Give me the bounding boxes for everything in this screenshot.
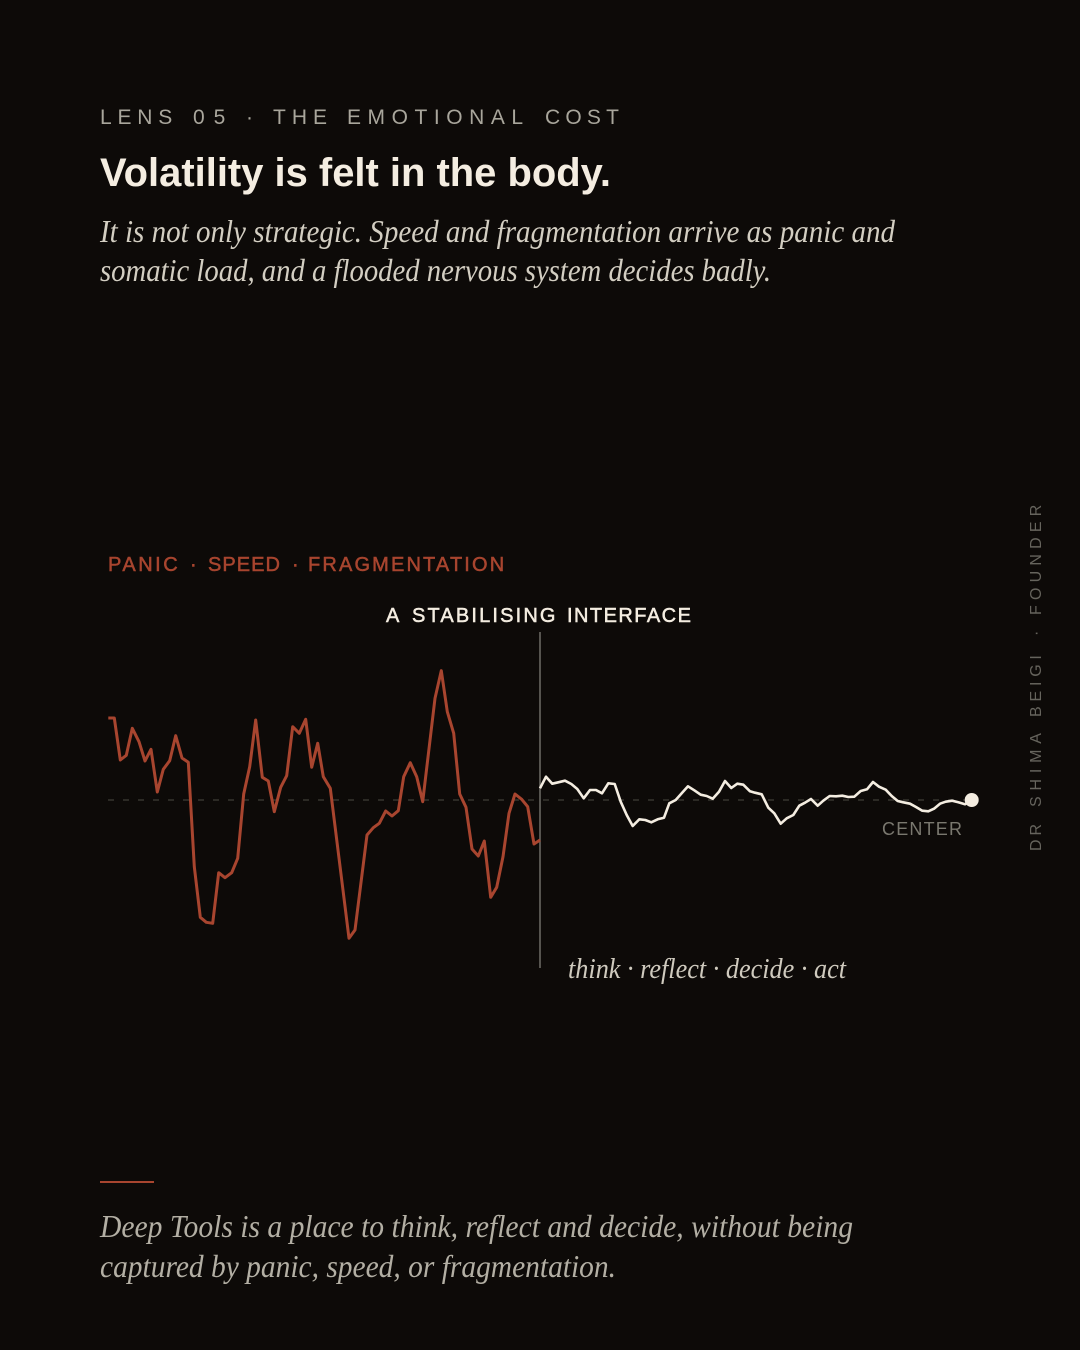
label: center: CENTER [882,819,963,839]
eyebrow label: THE [273,106,333,129]
vertical byline: BEIGI [1028,650,1045,717]
footer accent rule [100,1181,154,1183]
caption: think reflect decide act: think · reflect · decide · act [568,954,847,985]
label: panic speed fragmentation: · [292,554,299,576]
label: panic speed fragmentation: FRAGMENTATION [308,554,506,576]
chart: volatility to stability line [108,554,979,985]
calm white line [540,777,972,826]
subtitle text block: It is not only strategic. Speed and fragmentation arrive as panic and [99,213,896,249]
center dashed baseline [108,799,972,801]
label: a stabilising interface: STABILISING [412,605,558,627]
label: a stabilising interface: A [386,605,400,627]
eyebrow label: COST [545,106,624,129]
end point dot [965,793,979,807]
label: panic speed fragmentation [108,554,506,576]
vertical byline [1028,499,1045,851]
footer statement [99,1208,853,1284]
vertical byline: · [1028,631,1045,636]
volatile red line [108,671,540,938]
eyebrow label: · [246,106,253,129]
vertical byline: FOUNDER [1028,499,1045,615]
footer statement: captured by panic, speed, or fragmentation. [100,1248,616,1284]
label: a stabilising interface: INTERFACE [567,605,692,627]
subtitle text block: somatic load, and a flooded nervous system decides badly. [100,252,771,288]
label: panic speed fragmentation: SPEED [208,554,281,576]
label: panic speed fragmentation: PANIC [108,554,180,576]
eyebrow label: EMOTIONAL [347,106,530,129]
footer statement: Deep Tools is a place to think, reflect and decide, without being [99,1208,853,1244]
vertical byline: DR [1028,820,1045,851]
interface divider line [539,632,541,968]
vertical byline: SHIMA [1028,727,1045,807]
title: Volatility is felt in the body. [100,151,611,195]
label: a stabilising interface [386,605,692,627]
eyebrow label: 05 [193,106,234,129]
eyebrow label: LENS [100,106,178,129]
subtitle text block [99,213,896,288]
eyebrow label [100,106,624,129]
label: panic speed fragmentation: · [190,554,197,576]
